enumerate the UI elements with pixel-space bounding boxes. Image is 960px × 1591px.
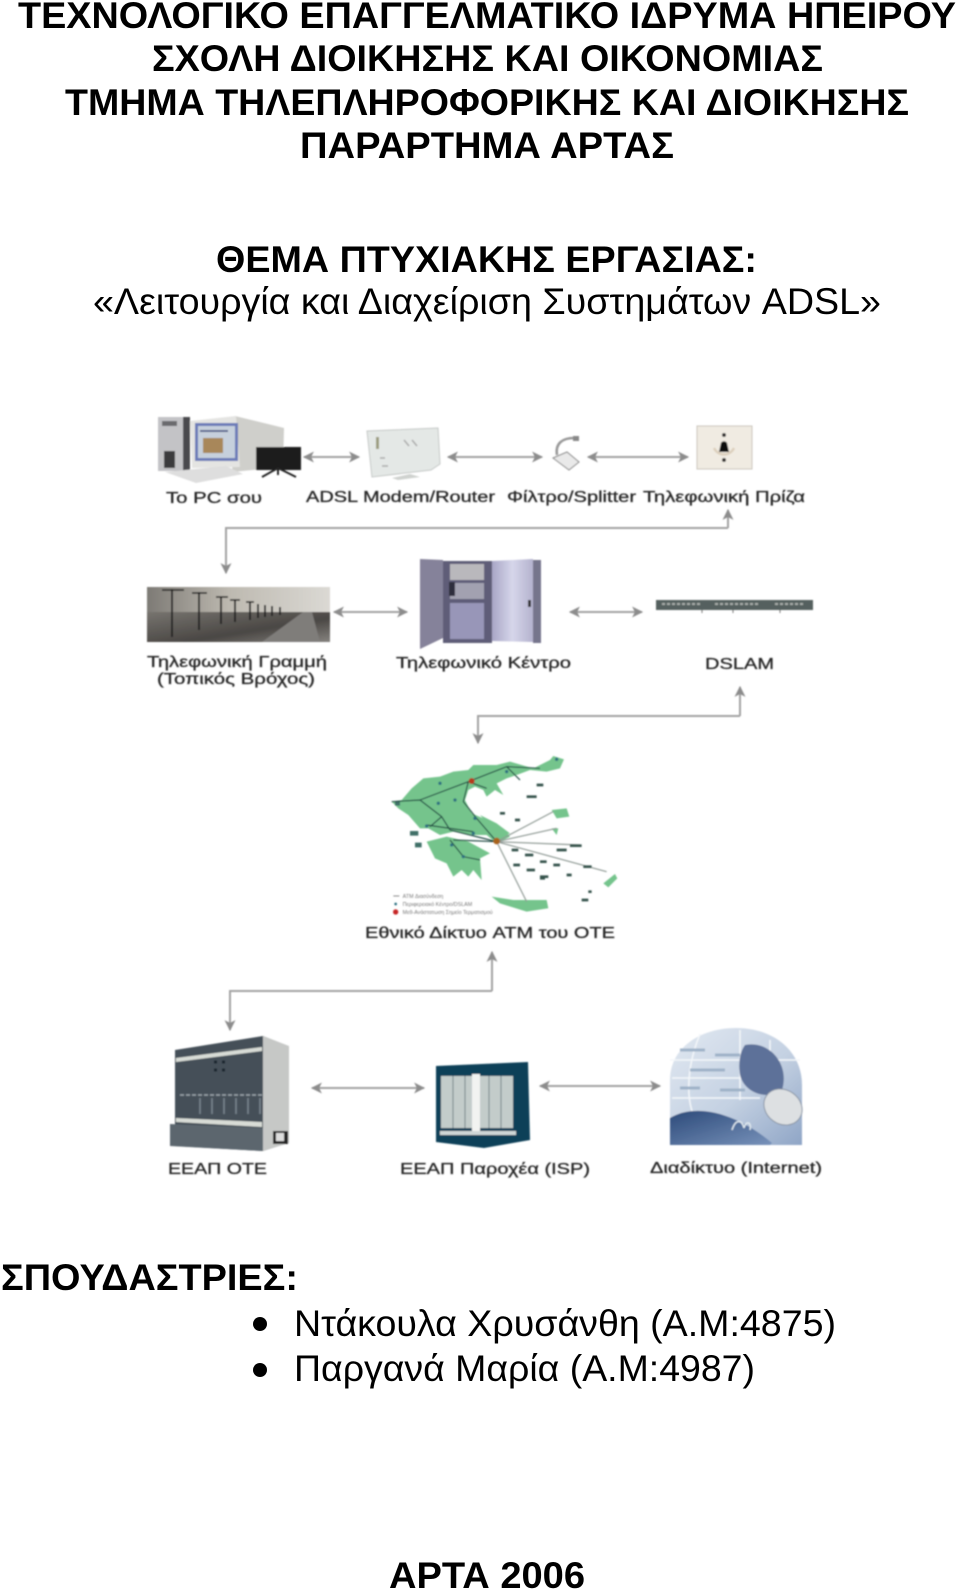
- caption: OTE switch: ΕΕΑΠ ΟΤΕ: [168, 1161, 267, 1178]
- photo: telephone line: [147, 587, 330, 642]
- thesis title: ΘΕΜΑ ΠΤΥΧΙΑΚΗΣ ΕΡΓΑΣΙΑΣ:: [216, 238, 757, 280]
- caption: telephone line: (Τοπικός Βρόχος): [157, 671, 315, 688]
- map legend: Μεθ-Ανάστατωση Σημείο Τερματισμού: [403, 909, 493, 916]
- header: institution: ΤΜΗΜΑ ΤΗΛΕΠΛΗΡΟΦΟΡΙΚΗΣ ΚΑΙ ΔΙΟΙΚΗΣΗΣ: [65, 81, 909, 123]
- caption: telephone line: [147, 654, 327, 688]
- caption: socket: Τηλεφωνική Πρίζα: [643, 489, 805, 506]
- icon: ADSL modem: [367, 428, 440, 480]
- caption: telephone line: Τηλεφωνική Γραμμή: [147, 654, 327, 671]
- arrow: OTE to ISP: [312, 1087, 424, 1089]
- heading: students: ΣΠΟΥΔΑΣΤΡΙΕΣ:: [1, 1256, 298, 1298]
- arrow: filter to socket: [588, 456, 688, 458]
- icon: internet globe and dish: [670, 1028, 809, 1145]
- map: national ATM network of Greece: [392, 756, 617, 916]
- arrow: line to exchange: [334, 611, 407, 613]
- icon: telephone socket: [697, 426, 752, 469]
- icon: telephone exchange cabinet: [420, 559, 541, 649]
- arrow: socket to line connector: [226, 510, 728, 573]
- caption: exchange: Τηλεφωνικό Κέντρο: [396, 655, 571, 672]
- arrow: ISP to internet: [540, 1085, 660, 1087]
- arrow: modem to filter: [448, 456, 542, 458]
- thesis title: [93, 238, 881, 322]
- icon: DSLAM rack: [656, 600, 813, 613]
- student 2: Παργανά Μαρία (Α.Μ:4987): [294, 1347, 755, 1389]
- header: institution: ΠΑΡΑΡΤΗΜΑ ΑΡΤΑΣ: [300, 124, 674, 166]
- icon: ISP ATM switch: [436, 1062, 530, 1148]
- caption: national ATM network: Εθνικό Δίκτυο ATM του OTE: [365, 925, 615, 942]
- caption: DSLAM: DSLAM: [705, 656, 774, 673]
- arrow: PC to modem: [304, 456, 359, 458]
- arrow: exchange to DSLAM: [570, 611, 642, 613]
- caption: internet: Διαδίκτυο (Internet): [650, 1160, 822, 1177]
- student 1: Ντάκουλα Χρυσάνθη (Α.Μ:4875): [294, 1302, 836, 1344]
- map legend: [393, 893, 493, 916]
- caption: filter: Φίλτρο/Splitter: [507, 489, 636, 506]
- icon: desktop PC: [158, 416, 301, 483]
- icon: filter splitter: [553, 436, 579, 470]
- bullet 1: [253, 1317, 267, 1331]
- arrow: DSLAM to map connector: [478, 687, 740, 743]
- student list: [253, 1302, 836, 1389]
- network diagram: [147, 416, 822, 1178]
- header: institution: ΣΧΟΛΗ ΔΙΟΙΚΗΣΗΣ ΚΑΙ ΟΙΚΟΝΟΜΙΑΣ: [152, 37, 823, 79]
- icon: OTE ATM switch: [170, 1036, 289, 1151]
- bullet 2: [253, 1363, 267, 1377]
- caption: ISP switch: ΕΕΑΠ Παροχέα (ISP): [400, 1161, 590, 1178]
- arrow: map to OTE connector: [230, 952, 492, 1030]
- map legend: ATM Διασύνδεση: [403, 893, 443, 900]
- caption: modem: ADSL Modem/Router: [306, 489, 495, 506]
- thesis title: «Λειτουργία και Διαχείριση Συστημάτων ADSL»: [93, 280, 881, 322]
- caption: PC: Το PC σου: [166, 490, 262, 507]
- map legend: Περιφερειακό Κέντρο/DSLAM: [403, 901, 472, 908]
- header: institution: [18, 0, 956, 166]
